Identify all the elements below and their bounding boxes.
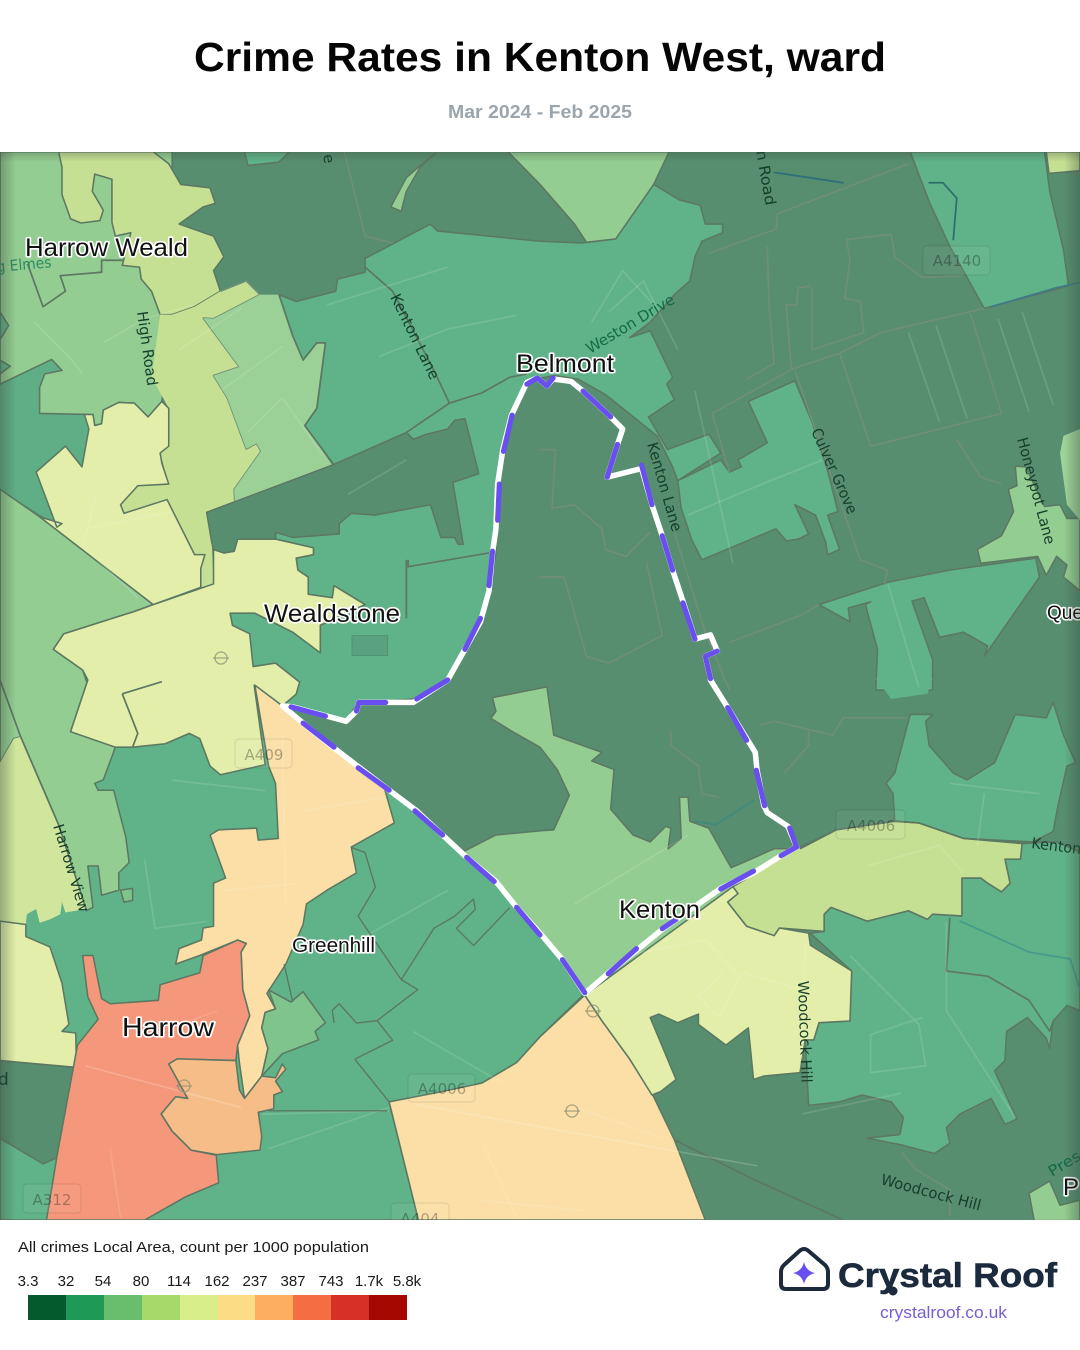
legend scale labels: 387 (280, 1273, 306, 1290)
legend title: All crimes Local Area, count per 1000 population (18, 1239, 369, 1256)
road name labels (0, 143, 1080, 1215)
place name labels: Belmont (516, 350, 614, 378)
road network and inner boundaries (0, 152, 1080, 1220)
subtitle: date range: Mar 2024 - Feb 2025 (448, 102, 632, 122)
road name labels: Culver Grove (807, 425, 861, 517)
map background: low crime dark green (0, 152, 1080, 1220)
place name labels: Harrow Weald (25, 234, 188, 262)
legend scale labels: 54 (95, 1273, 111, 1290)
place name labels: Harrow (122, 1012, 214, 1042)
road name labels: rn Road (751, 143, 780, 207)
road number plates: A4006 (418, 1080, 466, 1098)
icon: tube roundels (176, 652, 601, 1117)
legend scale labels: 114 (167, 1273, 191, 1290)
legend scale labels: 32 (58, 1273, 74, 1290)
road name labels: Kenton Lane (386, 291, 443, 382)
brand name: Crystal Roof (838, 1257, 1058, 1295)
legend scale labels: 743 (318, 1273, 344, 1290)
road name labels: Kenton Lane (643, 440, 686, 534)
place name labels: Kenton (619, 896, 700, 924)
place name labels: P (1063, 1174, 1079, 1201)
place name labels: Wealdstone (264, 600, 400, 628)
road name labels: Woodcock Hill (879, 1170, 983, 1215)
legend scale labels: 1.7k (355, 1273, 384, 1290)
title: Crime Rates in Kenton West, ward (194, 34, 886, 80)
logo key tail (888, 1286, 898, 1296)
legend scale labels: 237 (242, 1273, 268, 1290)
logo: Crystal Roof (781, 1249, 1058, 1322)
road name labels: e (319, 153, 338, 165)
road number plates (23, 246, 990, 1232)
legend (18, 1239, 422, 1320)
road name labels: Harrow View (49, 822, 93, 914)
road name labels: Woodcock Hill (794, 981, 816, 1083)
place name labels (25, 234, 1080, 1201)
choropleth regions (0, 152, 1080, 1221)
icon: house with star (781, 1249, 828, 1289)
legend scale labels: 162 (204, 1273, 230, 1290)
legend colour bar (28, 1295, 407, 1320)
road number plates: A4140 (933, 252, 981, 270)
road name labels: Weston Drive (583, 290, 678, 357)
legend scale labels: 3.3 (18, 1273, 38, 1290)
road name labels: Honeypot Lane (1013, 435, 1059, 546)
legend scale labels (18, 1273, 422, 1290)
place name labels: Greenhill (292, 935, 375, 957)
road number plates: A312 (33, 1191, 71, 1209)
ward boundary: Kenton West (282, 378, 797, 993)
map edge vignette (0, 152, 1080, 1220)
road number plates: A409 (245, 746, 283, 764)
legend scale labels: 80 (133, 1273, 149, 1290)
road number plates: A404 (401, 1210, 439, 1228)
road number plates: A4006 (847, 817, 895, 835)
website url: crystalroof.co.uk (880, 1304, 1008, 1322)
road name labels: High Road (133, 310, 161, 387)
legend scale labels: 5.8k (393, 1273, 422, 1290)
